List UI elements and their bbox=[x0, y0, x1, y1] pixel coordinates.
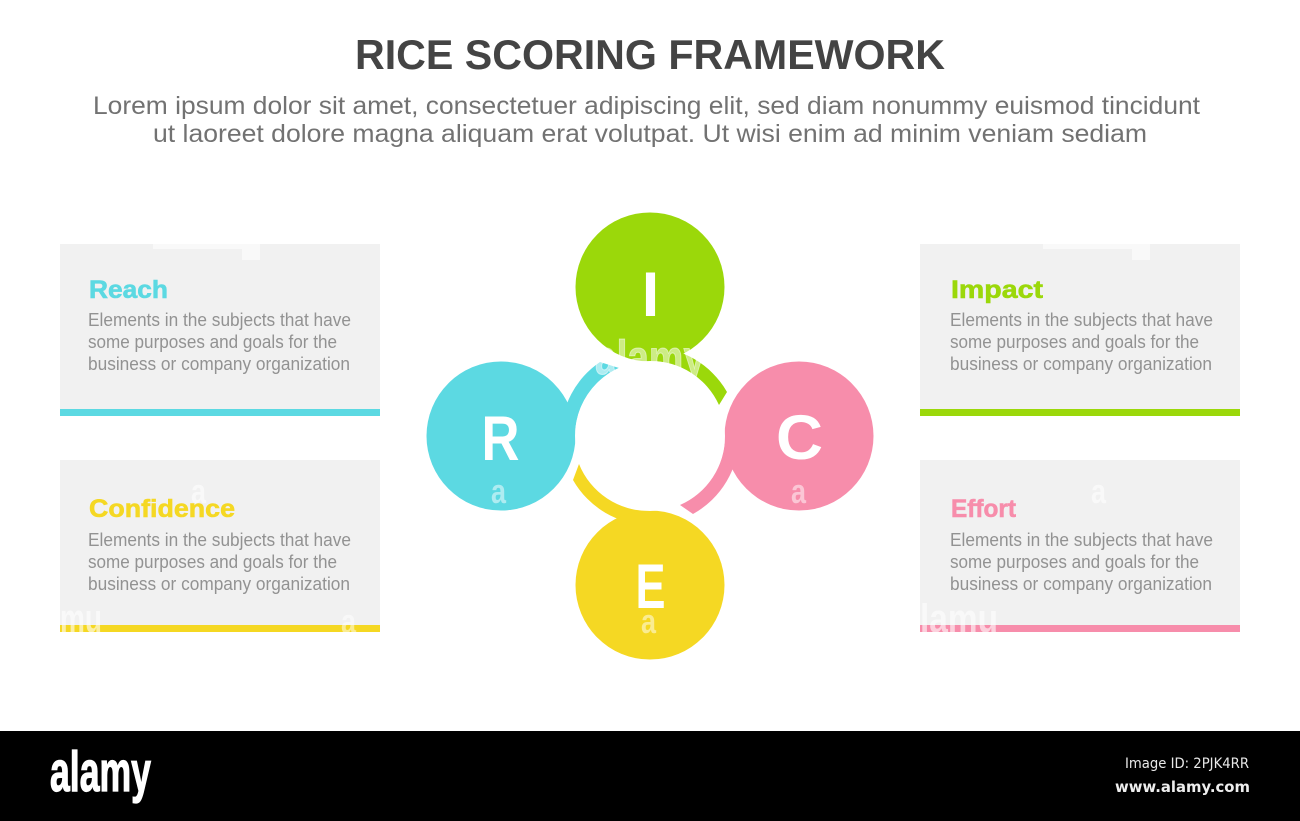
watermark fragments: alamy bbox=[595, 332, 705, 385]
arc: reach bbox=[561, 362, 619, 436]
watermark fragments: a bbox=[791, 473, 807, 511]
text block: confidence: business or company organization bbox=[88, 574, 350, 594]
arc: effort bbox=[573, 464, 650, 525]
heading: effort: Effort bbox=[951, 495, 1017, 523]
circle: C bbox=[724, 362, 874, 510]
heading: confidence: Confidence bbox=[89, 495, 235, 523]
circle: I: I bbox=[642, 260, 659, 330]
subtitle: ut laoreet dolore magna aliquam erat volutpat. Ut wisi enim ad minim veniam sediam bbox=[153, 120, 1147, 148]
arc: impact bbox=[650, 347, 727, 405]
center circle bbox=[575, 361, 725, 511]
circle: E bbox=[576, 510, 724, 660]
text block: reach: some purposes and goals for the bbox=[88, 332, 337, 352]
circle: C: C bbox=[776, 403, 823, 473]
footer logo: alamy bbox=[50, 740, 151, 804]
text block: impact: business or company organization bbox=[950, 354, 1212, 374]
watermark fragments: lamu bbox=[920, 597, 998, 641]
text block: confidence bbox=[88, 530, 351, 594]
text block: reach: Elements in the subjects that have bbox=[88, 310, 351, 330]
panel: effort bbox=[920, 460, 1240, 632]
text block: effort: some purposes and goals for the bbox=[950, 552, 1199, 572]
text block: effort: Elements in the subjects that have bbox=[950, 530, 1213, 550]
text block: effort bbox=[950, 530, 1213, 594]
panel: confidence bbox=[60, 460, 380, 632]
circle: R bbox=[426, 362, 576, 510]
watermark fragments: a bbox=[1091, 473, 1107, 511]
arc: confidence bbox=[680, 436, 739, 514]
text block: reach: business or company organization bbox=[88, 354, 350, 374]
text block: impact: some purposes and goals for the bbox=[950, 332, 1199, 352]
text block: impact: Elements in the subjects that have bbox=[950, 310, 1213, 330]
watermark fragments bbox=[60, 244, 1150, 641]
watermark fragments: a bbox=[191, 473, 207, 511]
text block: confidence: some purposes and goals for the bbox=[88, 552, 337, 572]
heading: reach: Reach bbox=[89, 276, 168, 304]
circle: I bbox=[576, 212, 724, 362]
subtitle bbox=[93, 92, 1200, 148]
watermark fragments: a bbox=[641, 603, 657, 641]
image id: Image ID: 2PJK4RR bbox=[1125, 756, 1249, 772]
circle: E: E bbox=[636, 552, 666, 622]
title: RICE SCORING FRAMEWORK bbox=[355, 31, 945, 78]
text block: reach bbox=[88, 310, 351, 374]
watermark fragments: mu bbox=[60, 597, 102, 641]
footer url: www.alamy.com bbox=[1115, 778, 1250, 796]
watermark fragments: a bbox=[341, 603, 357, 641]
text block: confidence: Elements in the subjects that have bbox=[88, 530, 351, 550]
circle: R: R bbox=[482, 404, 520, 474]
footer bar bbox=[0, 731, 1300, 821]
panel: reach bbox=[60, 244, 380, 416]
panel: impact bbox=[920, 244, 1240, 416]
text block: effort: business or company organization bbox=[950, 574, 1212, 594]
watermark fragments: a bbox=[491, 473, 507, 511]
subtitle: Lorem ipsum dolor sit amet, consectetuer adipiscing elit, sed diam nonummy euismod tincidunt bbox=[93, 92, 1200, 120]
text block: impact bbox=[950, 310, 1213, 374]
heading: impact: Impact bbox=[951, 276, 1044, 304]
